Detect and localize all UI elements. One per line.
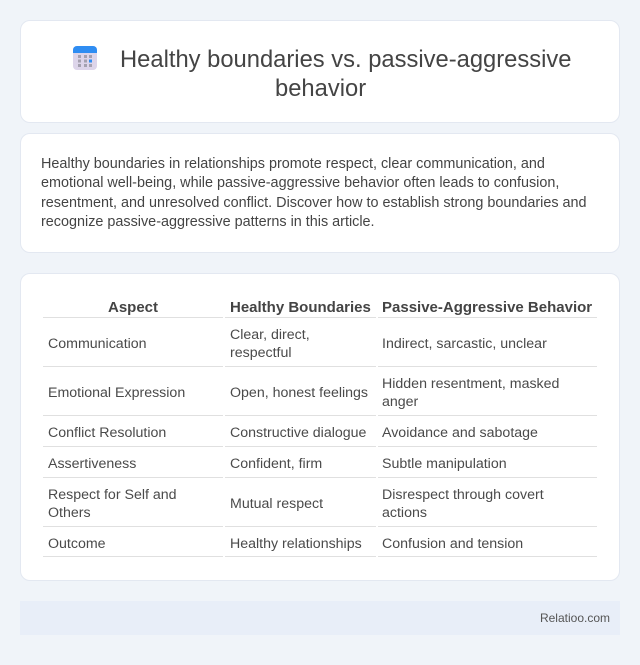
- table headers: Aspect: [108, 299, 158, 316]
- title: Healthy boundaries vs. passive-aggressive: [120, 46, 571, 72]
- row: emotional expression: Open, honest feelings: [230, 385, 368, 401]
- row: communication: Clear, direct,: [230, 327, 310, 343]
- row: assertiveness: Confident, firm: [230, 456, 322, 472]
- row: respect: actions: [382, 505, 427, 521]
- row: communication: [48, 327, 547, 361]
- title: [120, 46, 571, 102]
- intro text: Healthy boundaries in relationships promote respect, clear communication, and: [41, 156, 545, 172]
- intro text: [41, 156, 587, 230]
- row: outcome: Healthy relationships: [230, 536, 362, 552]
- title: behavior: [275, 74, 366, 102]
- row: respect: Respect for Self and: [48, 487, 177, 503]
- row: conflict resolution: [48, 425, 538, 441]
- row: respect: Mutual respect: [230, 496, 323, 512]
- intro text: emotional well-being, while passive-aggressive behavior often leads to confusion,: [41, 175, 559, 191]
- footer credit: Relatioo.com: [540, 611, 610, 625]
- row: emotional expression: Hidden resentment, masked: [382, 376, 559, 392]
- row: communication: Indirect, sarcastic, unclear: [382, 336, 547, 352]
- panel: introduction: [20, 133, 620, 253]
- panel: title card: [20, 20, 620, 123]
- icon: calendar: [73, 46, 97, 70]
- footer bar: [20, 601, 620, 635]
- row: outcome: Outcome: [48, 536, 106, 552]
- row: conflict resolution: Constructive dialogue: [230, 425, 366, 441]
- row: outcome: [48, 536, 523, 552]
- row: communication: Communication: [48, 336, 147, 352]
- row: emotional expression: [48, 376, 559, 410]
- table headers: Healthy Boundaries: [230, 299, 371, 316]
- row: respect: Disrespect through covert: [382, 487, 544, 503]
- row: outcome: Confusion and tension: [382, 536, 523, 552]
- row: assertiveness: Subtle manipulation: [382, 456, 507, 472]
- intro text: recognize passive-aggressive patterns in this article.: [41, 214, 375, 230]
- row: emotional expression: Emotional Expression: [48, 385, 185, 401]
- row: conflict resolution: Avoidance and sabotage: [382, 425, 538, 441]
- row: assertiveness: Assertiveness: [48, 456, 136, 472]
- table headers: Passive-Aggressive Behavior: [382, 299, 592, 316]
- row: communication: respectful: [230, 345, 292, 361]
- table grid lines: [43, 317, 597, 557]
- panel: comparison table: [20, 273, 620, 581]
- row: assertiveness: [48, 456, 507, 472]
- row: conflict resolution: Conflict Resolution: [48, 425, 166, 441]
- row: emotional expression: anger: [382, 394, 418, 410]
- row: respect: [48, 487, 544, 521]
- table headers: [108, 299, 592, 316]
- intro text: resentment, and unresolved conflict. Discover how to establish strong boundaries and: [41, 195, 587, 211]
- row: respect: Others: [48, 505, 91, 521]
